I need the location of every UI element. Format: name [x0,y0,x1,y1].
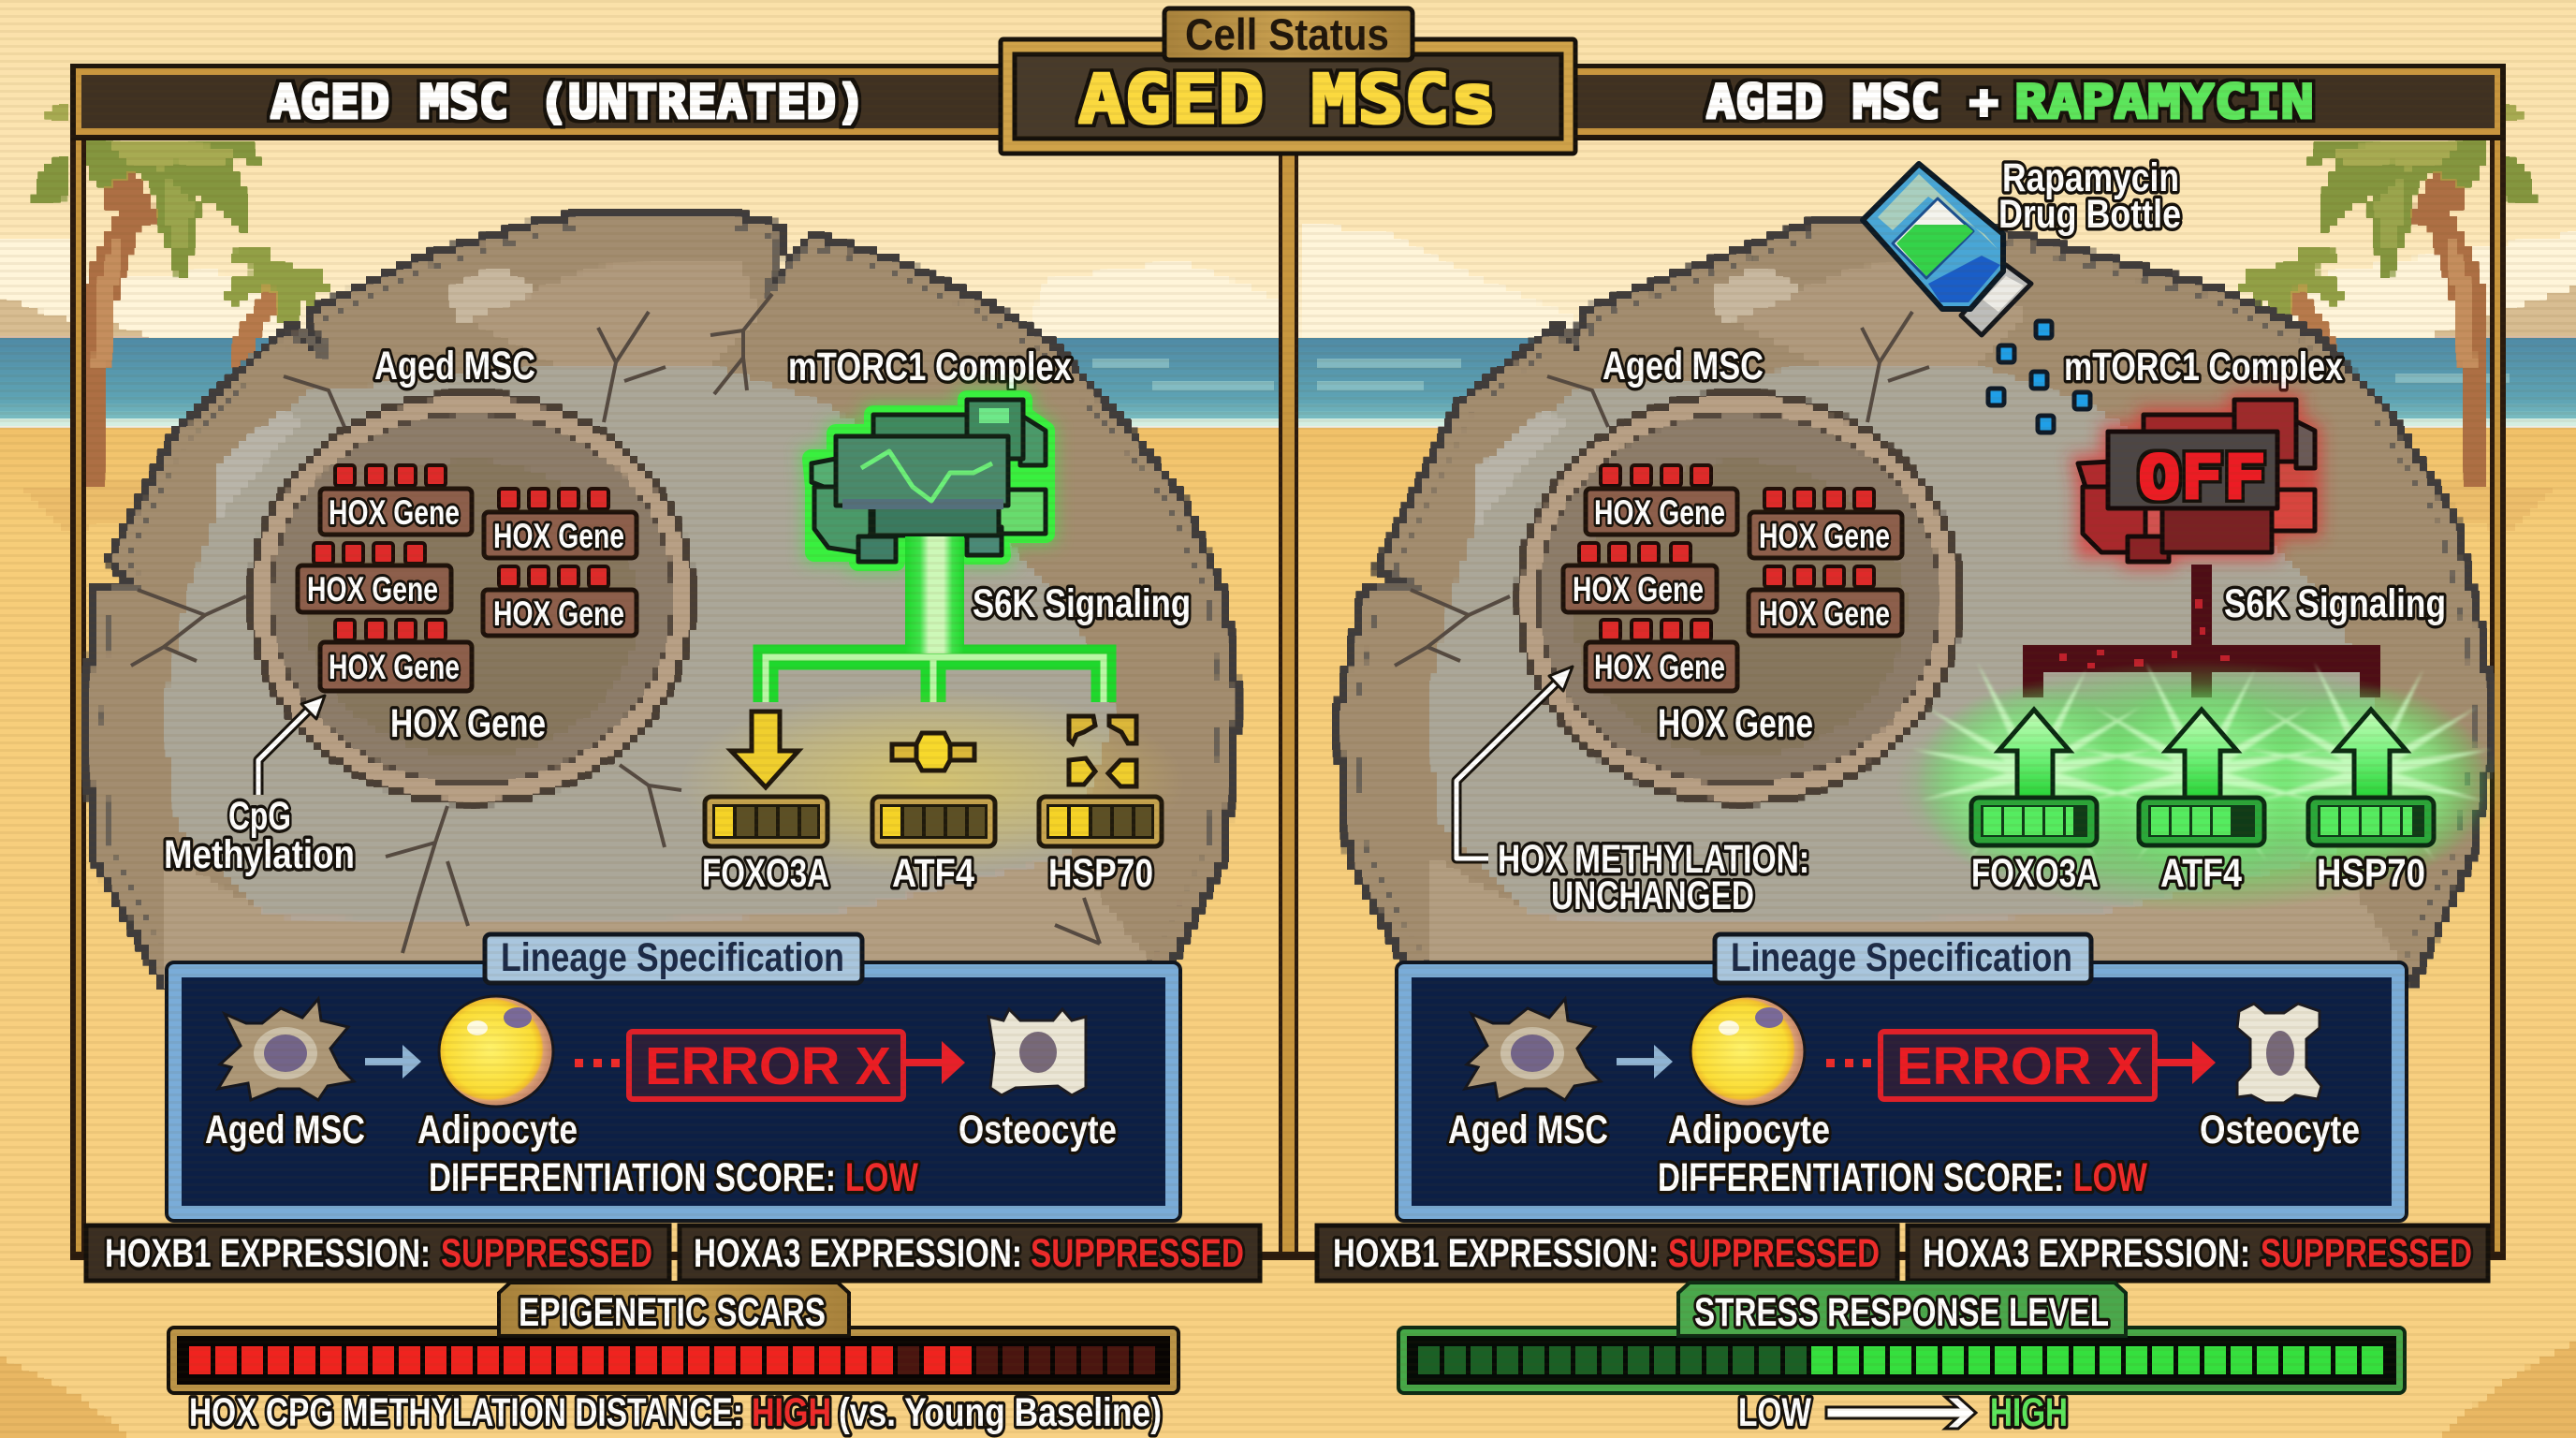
meter: stress response [1398,1328,2405,1393]
indicator: HSP70 low [1039,716,1162,896]
arrow: HOX methylation pointer [1456,667,1573,858]
labels: Adipocyte [417,1108,578,1152]
labels: Osteocyte [959,1108,1117,1152]
arrow: MSC to adipocyte [1617,1045,1673,1078]
expression bar: HOXA3 left [680,1225,1260,1281]
label: CpG Methylation [164,794,355,877]
icon: rapamycin drug bottle [1863,164,2031,335]
indicator: FOXO3A low [702,712,829,896]
label: CpG Methylation: CpG [228,794,291,839]
title plate: AGED MSCs [1078,60,1497,139]
panel: right cell (rapamycin) [1338,155,2504,985]
icon: aged MSC [218,999,354,1100]
meter: epigenetic scars [168,1328,1178,1393]
label: HOX methylation unchanged: UNCHANGED [1551,873,1754,918]
label: HOX Gene: HOX Gene [1658,701,1813,746]
labels [205,1108,1117,1152]
indicator: FOXO3A low: FOXO3A [702,851,829,896]
scale: low to high: HIGH [1990,1390,2068,1435]
expression bar: HOXB1 right: SUPPRESSED [1668,1231,1880,1276]
scale: low to high: LOW [1738,1390,1811,1435]
header bar: left panel: AGED MSC (UNTREATED) [271,75,866,129]
cracks [1395,312,1929,666]
labels [1448,1108,2360,1152]
label: OFF: OFF [2138,444,2266,513]
expression bar: HOXB1 left: SUPPRESSED [441,1231,652,1276]
palm trees [33,100,2536,483]
tab: Epigenetic Scars: EPIGENETIC SCARS [519,1290,826,1335]
arrow: MSC to adipocyte [365,1045,421,1078]
label: Rapamycin Drug Bottle: Rapamycin [2002,155,2179,200]
palms left [33,100,328,483]
label: HOX Gene: HOX Gene [390,701,546,746]
label: HOX methylation unchanged: HOX METHYLATION: [1498,837,1809,882]
header bar: right panel: AGED MSC + [1706,75,1998,129]
differentiation score: DIFFERENTIATION SCORE: [429,1155,836,1200]
label: mTORC1 Complex: mTORC1 Complex [788,345,1072,389]
panel: left cell (untreated) [86,215,1236,985]
label: Aged MSC: Aged MSC [1603,344,1764,389]
indicator: ATF4 high: ATF4 [2160,851,2242,896]
expression bar: HOXB1 right [1317,1225,1897,1281]
expression bar: HOXA3 left: SUPPRESSED [1031,1231,1244,1276]
header bar: right panel [1568,64,2506,140]
scale: low to high [1738,1390,2068,1435]
nucleus [1516,391,1962,805]
tab: Stress Response Level: STRESS RESPONSE LEVEL [1694,1290,2109,1335]
expression bar: HOXA3 right [1908,1225,2488,1281]
indicator: HSP70 high [2308,710,2434,896]
arrow: blocked to osteocyte [903,1041,965,1084]
caption: methylation distance: (vs. Young Baseline) [839,1390,1162,1435]
palms right [2241,100,2536,483]
sea [0,339,2576,427]
panel frames [70,140,2506,1260]
caption: methylation distance: HIGH [752,1390,831,1435]
label: CpG Methylation: Methylation [164,832,355,877]
arrow: blocked to osteocyte [2156,1041,2216,1084]
icon: mTORC1 complex off [2078,400,2315,562]
panel: lineage specification (right) [1397,934,2407,1221]
dotted link [575,1059,620,1067]
expression bar: HOXB1 left: HOXB1 EXPRESSION: [105,1231,431,1276]
differentiation score: LOW [845,1155,918,1200]
expression bar: HOXA3 right: SUPPRESSED [2261,1231,2472,1276]
distant hills [0,286,2576,343]
labels: Aged MSC [1448,1108,1608,1152]
arrow: CpG methylation pointer [258,696,325,795]
expression bar: HOXA3 left: HOXA3 EXPRESSION: [694,1231,1022,1276]
labels: Aged MSC [205,1108,365,1152]
label: S6K Signaling: S6K Signaling [973,581,1191,626]
title plate [1001,39,1575,154]
HOX gene blocks: HOX Gene [1594,493,1725,532]
cracks [131,294,1100,953]
label: Aged MSC: Aged MSC [374,344,535,389]
HOX gene blocks [298,465,637,691]
icon: adipocyte [439,996,553,1107]
indicator: FOXO3A high [1971,710,2099,896]
differentiation score: LOW [2073,1155,2147,1200]
arrow: S6K signal blocked [2023,565,2380,697]
icon: mTORC1 complex active [812,400,1046,562]
caption: methylation distance: HOX CPG METHYLATION DISTANCE: [189,1390,743,1435]
arrow: S6K signal active [766,536,1104,702]
HOX gene blocks: HOX Gene [1594,648,1725,686]
icon: osteocyte [988,1009,1086,1095]
expression bar: HOXA3 right: HOXA3 EXPRESSION: [1923,1231,2250,1276]
label: HOX methylation unchanged [1498,837,1809,918]
HOX gene blocks: HOX Gene [1759,517,1890,555]
label: Rapamycin Drug Bottle: Drug Bottle [1998,192,2181,237]
indicator: ATF4 high [2139,710,2264,896]
expression bar: HOXB1 right: HOXB1 EXPRESSION: [1333,1231,1659,1276]
tab: Stress Response Level [1678,1283,2126,1336]
HOX gene blocks: HOX Gene [329,648,460,686]
indicator: FOXO3A high: FOXO3A [1971,851,2099,896]
panel: lineage specification (left) [167,934,1180,1221]
glow: stress response burst [1895,660,2504,913]
label: Rapamycin Drug Bottle [1998,155,2181,237]
HOX gene blocks: HOX Gene [307,570,438,609]
nucleus [249,391,695,805]
tab: Cell Status: Cell Status [1185,9,1389,59]
HOX gene blocks: HOX Gene [1573,570,1704,609]
header bar: left panel [70,64,1008,140]
icon: osteocyte [2237,1004,2321,1103]
dotted link [1826,1059,1871,1067]
HOX gene blocks: HOX Gene [493,517,624,555]
expression bar: HOXB1 left [86,1225,669,1281]
HOX gene blocks: HOX Gene [493,594,624,633]
header bar: right panel: RAPAMYCIN [2014,75,2314,129]
indicator: ATF4 low [872,733,995,896]
label: S6K Signaling: S6K Signaling [2224,581,2446,626]
HOX gene blocks: HOX Gene [329,493,460,532]
HOX gene blocks [1563,465,1902,691]
label: mTORC1 Complex: mTORC1 Complex [2064,345,2343,389]
labels: Osteocyte [2200,1108,2360,1152]
glow: signaling active [812,400,1046,562]
glow: mTORC1 off [2078,400,2315,562]
icon: aged MSC [1465,999,1601,1100]
HOX gene blocks: HOX Gene [1759,594,1890,633]
icon: adipocyte [1690,996,1805,1107]
labels: Adipocyte [1668,1108,1830,1152]
sand [0,427,2576,1438]
error box: ERROR X [1896,1036,2143,1096]
tab: Lineage Specification: Lineage Specification [1731,935,2072,980]
error box: ERROR X [645,1036,891,1096]
tab: Epigenetic Scars [499,1283,849,1336]
indicator: HSP70 high: HSP70 [2317,851,2425,896]
tab: Lineage Specification: Lineage Specification [501,935,844,980]
indicator: ATF4 low: ATF4 [892,851,974,896]
differentiation score: DIFFERENTIATION SCORE: [1658,1155,2064,1200]
glow: low stress response [680,688,1185,875]
indicator: HSP70 low: HSP70 [1048,851,1153,896]
icon: rapamycin drops [1988,321,2090,433]
clouds [0,225,2576,343]
